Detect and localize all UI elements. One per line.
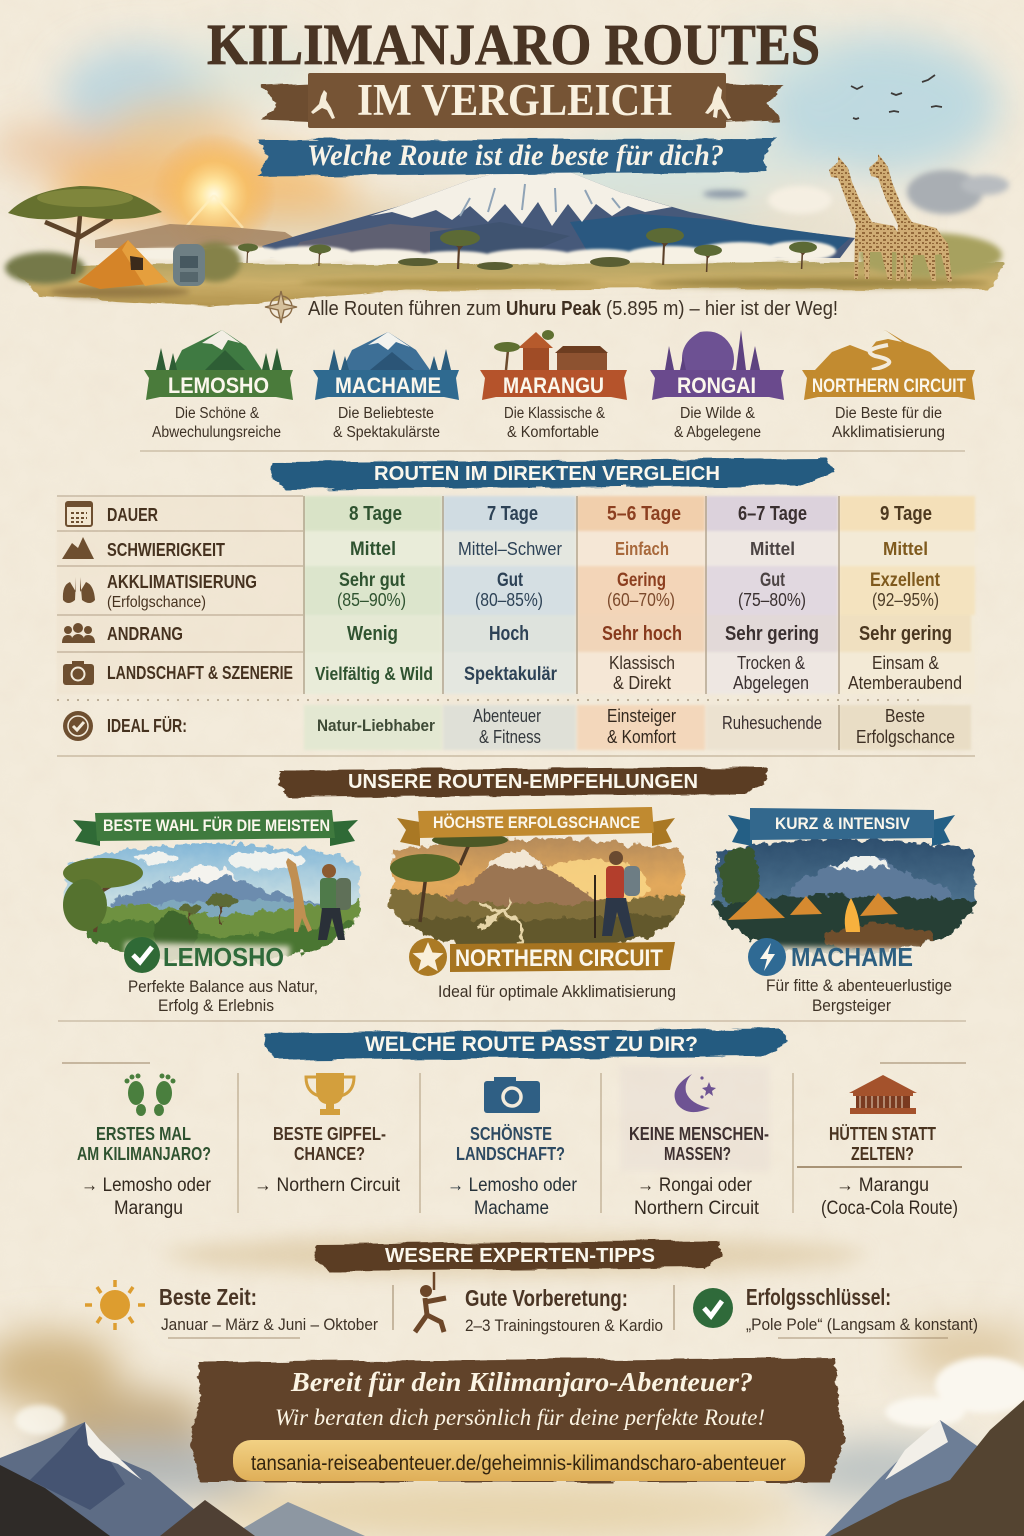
guide: summit chance: CHANCE? [294,1144,365,1164]
icon: trophy [306,1073,354,1115]
icon: mountain [62,537,94,559]
name plate: NORTHERN CIRCUIT [455,945,663,972]
call to action: Wir beraten dich persönlich für deine perfekte Route! [275,1405,765,1430]
column: Northern Circuit: Atemberaubend [848,673,962,693]
column: Northern Circuit: Erfolgschance [856,727,955,747]
link pill: tansania-reiseabenteuer.de/geheimnis-kilimandscharo-abenteuer [251,1452,786,1475]
guide: landscape: Machame [474,1198,549,1219]
column: Machame: (80–85%) [475,590,543,610]
paper patch behind name [125,942,290,974]
row labels: SCHWIERIGKEIT [107,540,225,560]
column: Machame: & Fitness [479,727,541,747]
guide: first time: → Lemosho oder [81,1175,212,1196]
column: Marangu: & Komfort [607,727,676,747]
icon: camera [484,1077,540,1113]
column: Marangu: 5–6 Tage [607,503,681,525]
icon: hiker left [311,90,335,119]
guide: landscape: LANDSCHAFT? [456,1144,565,1164]
icon: climber [415,1272,446,1332]
section heading: direct comparison: ROUTEN IM DIREKTEN VERGLEICH [374,463,720,485]
icon: compass [265,291,297,323]
tip: best time: Beste Zeit: [159,1284,257,1310]
column: Rongai: 6–7 Tage [738,503,807,525]
comparison table [57,496,975,756]
route badge: Rongai: RONGAI [677,373,756,398]
column: Northern Circuit: (92–95%) [872,590,939,610]
tagline with compass: Uhuru Peak [506,298,602,320]
guide: first time: ERSTES MAL [96,1124,191,1144]
savanna ground [5,233,1005,306]
route badge: Northern Circuit: NORTHERN CIRCUIT [812,376,966,397]
row labels [107,505,293,736]
column: Northern Circuit: Sehr gering [859,623,952,645]
route badge: Machame [313,332,459,441]
guide: first time [77,1074,212,1219]
guide: no crowds: KEINE MENSCHEN- [629,1124,769,1144]
guide: first time: AM KILIMANJARO? [77,1144,211,1164]
tip: best time [159,1284,378,1334]
hiker [318,864,351,940]
column: Marangu: Gering [617,570,666,591]
tagline with compass: Alle Routen führen zum [308,298,501,320]
cloud band [128,241,836,265]
column: Marangu [602,503,682,747]
acacia tree [8,186,162,274]
column: Lemosho: (85–90%) [337,590,406,610]
tip: preparation: Gute Vorberetung: [465,1285,628,1311]
section heading: recommendations [277,767,770,797]
distant clouds right [703,170,1009,214]
column: Machame: Spektakulär [464,664,558,685]
row labels: IDEAL FÜR: [107,716,187,736]
watercolor washes [0,1328,1024,1536]
guide: no crowds: Northern Circuit [634,1198,760,1219]
column: Rongai: (75–80%) [738,590,806,610]
column: Marangu: Einfach [615,539,669,559]
row labels: DAUER [107,505,158,525]
recommendation card: Lemosho: LEMOSHO [163,942,284,972]
recommendation card: Lemosho: Erfolg & Erlebnis [158,996,274,1015]
column: Marangu: Sehr hoch [602,623,682,645]
column: Northern Circuit: Mittel [883,539,928,559]
row labels: ANDRANG [107,624,183,644]
scene illustration [711,838,978,957]
ribbon [397,807,675,846]
guide: no crowds: MASSEN? [664,1144,731,1164]
backpack [173,244,205,286]
tip: best time: Januar – März & Juni – Oktober [161,1315,378,1334]
ribbon: KURZ & INTENSIV [775,814,911,833]
savanna trees [238,228,817,272]
ribbon [73,810,358,846]
tagline with compass: (5.895 m) – hier ist der Weg! [606,298,838,320]
column: Rongai: Abgelegen [733,673,809,693]
route badge: Machame: Die Beliebteste [338,405,434,422]
section heading: direct comparison [270,459,836,489]
tip: key to success: Erfolgsschlüssel: [746,1284,891,1310]
route badge: Rongai: Die Wilde & [680,405,756,422]
guide: landscape: → Lemosho oder [447,1175,578,1196]
recommendation card: Machame: MACHAME [791,942,913,972]
column: Rongai: Trocken & [737,653,805,673]
column: Rongai [722,503,822,733]
sun [152,133,276,257]
column: Northern Circuit [848,503,962,747]
column: Lemosho: Mittel [350,539,396,560]
row labels: (Erfolgschance) [107,594,206,611]
route badge: Rongai [650,330,784,441]
icon: people [62,623,95,643]
column: Rongai: Gut [760,570,786,591]
guide: huts: → Marangu [836,1175,929,1196]
tip: preparation [465,1285,663,1335]
recommendation card: Lemosho [55,810,370,1015]
column: Marangu: (60–70%) [607,590,675,610]
guide: landscape [447,1077,578,1219]
route badge: Northern Circuit [802,330,975,441]
campfire [845,898,860,932]
column: Rongai: Mittel [750,539,795,559]
ribbon [728,808,955,846]
tip: key to success [746,1284,978,1334]
column: Lemosho: 8 Tage [349,503,402,525]
icon: moon and stars [675,1074,716,1112]
column: Machame [458,503,562,747]
route badge: Rongai: & Abgelegene [674,424,761,441]
icon: check badge [693,1288,733,1328]
tip: key to success: „Pole Pole“ (Langsam & konstant) [746,1315,978,1334]
column: Lemosho: Sehr gut [339,570,406,591]
guide: first time: Marangu [114,1198,183,1219]
link pill [233,1440,805,1481]
guide: no crowds [620,1066,770,1219]
icon: camera [63,661,94,685]
left peaks [0,1422,250,1536]
guide: summit chance: BESTE GIPFEL- [273,1124,386,1144]
column: Rongai: Ruhesuchende [722,713,822,733]
paper patch behind name [750,946,920,974]
column: Northern Circuit: 9 Tage [880,503,932,525]
column: Lemosho: Wenig [347,623,398,645]
tree [63,858,143,932]
column: Machame: Gut [497,570,524,591]
tagline with compass [265,291,838,323]
icon: seal with check [63,711,93,741]
column: Lemosho [315,503,435,735]
column: Northern Circuit: Exzellent [870,570,941,591]
route badge: Lemosho: Abwechulungsreiche [152,424,281,441]
column: Rongai: Sehr gering [725,623,819,645]
mountain Kilimanjaro [262,172,855,258]
guide: huts: HÜTTEN STATT [829,1124,936,1144]
recommendation card: Northern Circuit: Ideal für optimale Akklimatisierung [438,982,676,1001]
column tints [57,496,975,750]
route badge: Lemosho [144,330,293,441]
column: Marangu: Einsteiger [607,706,676,726]
route badge: Marangu: Die Klassische & [504,405,606,422]
hiker [595,851,640,938]
column: Northern Circuit: Einsam & [872,653,939,673]
guide: no crowds: → Rongai oder [637,1175,753,1196]
column: Lemosho: Vielfältig & Wild [315,664,433,684]
guide: huts [797,1075,962,1219]
guide: landscape: SCHÖNSTE [470,1124,552,1144]
ribbon: HÖCHSTE ERFOLGSCHANCE [433,813,640,832]
column: Northern Circuit: Beste [885,706,925,726]
scene illustration [388,836,686,944]
birds [851,75,942,119]
hero illustration: Kilimanjaro savanna [0,25,1009,306]
banner: im vergleich [259,73,782,128]
guide: huts: (Coca-Cola Route) [821,1198,958,1219]
row labels: LANDSCHAFT & SZENERIE [107,663,293,683]
section heading: expert tips [165,1235,865,1275]
tips row [85,1272,978,1338]
icon: hut [849,1075,917,1114]
section heading: which route [263,1029,787,1060]
icon: sun [85,1280,145,1330]
route badge: Machame: & Spektakulärste [333,424,440,441]
guide: summit chance [254,1073,401,1196]
watercolor sky [0,25,1000,254]
route badge: Northern Circuit: Akklimatisierung [832,424,945,441]
call to action: Bereit für dein Kilimanjaro-Abenteuer? [290,1367,753,1397]
clouds [15,1357,1024,1435]
column: Machame: Abenteuer [473,706,541,726]
giraffes [829,154,952,282]
right peaks [825,1420,1024,1536]
guide: huts: ZELTEN? [851,1144,914,1164]
guide: summit chance: → Northern Circuit [254,1175,401,1196]
route badge: Northern Circuit: Die Beste für die [835,405,942,422]
banner heading: IM VERGLEICH [357,75,672,125]
icon: footprints [124,1074,176,1116]
route badge: Lemosho: LEMOSHO [168,373,269,398]
recommendation card: Lemosho: Perfekte Balance aus Natur, [128,977,318,996]
scene illustration [63,840,362,964]
section heading: recommendations: UNSERE ROUTEN-EMPFEHLUNGEN [348,771,698,793]
column: Machame: Mittel–Schwer [458,539,562,559]
giraffe [286,858,312,932]
tree [390,833,508,922]
badge: star [409,938,447,976]
section heading: which route: WELCHE ROUTE PASST ZU DIR? [365,1033,698,1056]
icon: hikers right [705,86,731,119]
badge: check [124,937,160,973]
footer mountain landscape [0,1328,1024,1536]
column: Marangu: Klassisch [609,653,675,673]
column: Machame: Hoch [489,623,529,645]
recommendation card: Machame [705,808,980,1015]
call to action [190,1358,845,1482]
route badge: Machame: MACHAME [335,373,441,398]
section heading: expert tips: WESERE EXPERTEN-TIPPS [385,1245,655,1267]
tents [728,892,898,920]
distant hills [95,224,310,248]
recommendation card: Northern Circuit [385,807,690,1001]
title: KILIMANJARO ROUTES [207,12,820,77]
route badge: Lemosho: Die Schöne & [175,405,260,422]
route badge: Marangu [480,330,627,441]
route badge: Marangu: & Komfortable [507,424,599,441]
tip: preparation: 2–3 Trainingstouren & Kardio [465,1316,663,1335]
recommendation card: Machame: Bergsteiger [812,996,891,1015]
icon: lungs [63,577,95,603]
tent [78,240,168,289]
recommendation card: Machame: Für fitte & abenteuerlustige [766,976,952,995]
column: Lemosho: Natur-Liebhaber [317,716,435,735]
banner: welche route: Welche Route ist die beste für dich? [307,139,724,172]
column: Machame: 7 Tage [487,503,538,525]
icon: calendar [66,502,92,526]
row labels: AKKLIMATISIERUNG [107,572,257,592]
column: Marangu: & Direkt [613,673,671,693]
route badge: Marangu: MARANGU [503,373,604,398]
badge: lightning [748,938,786,976]
ribbon: BESTE WAHL FÜR DIE MEISTEN [103,816,330,835]
